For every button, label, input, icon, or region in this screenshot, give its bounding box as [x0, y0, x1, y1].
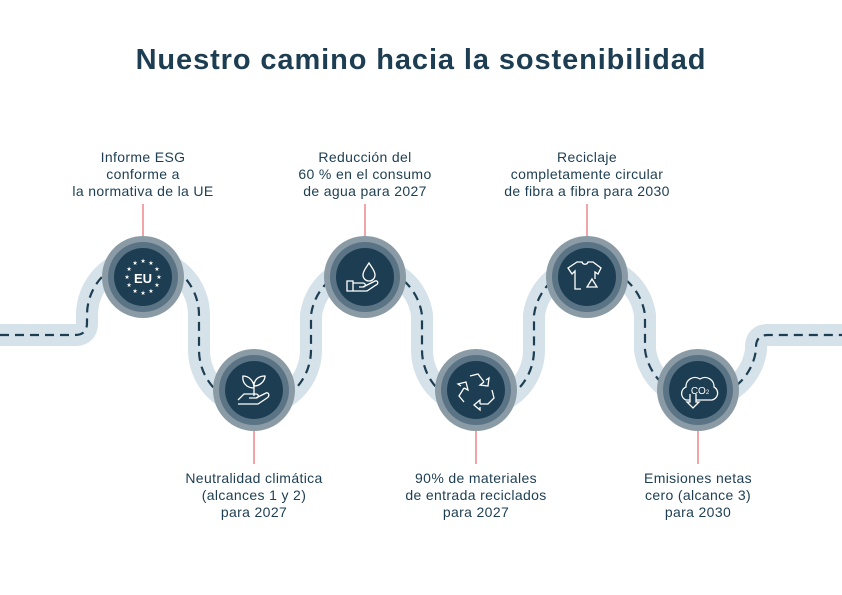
milestone: EU: ★: [124, 274, 130, 281]
milestone: EU: ★: [126, 282, 132, 289]
label 4: [185, 470, 323, 520]
label 5: 90% de materiales: [415, 470, 537, 486]
connector lines: [143, 204, 698, 464]
milestone: EU: ★: [156, 274, 162, 281]
milestone: EU: ★: [154, 266, 160, 273]
milestone: recycle: [435, 349, 517, 431]
milestone: EU: ★: [148, 260, 154, 267]
label 2: [298, 149, 432, 199]
label 5: de entrada reciclados: [405, 487, 547, 503]
milestone: CO2: CO2: [691, 386, 710, 397]
label 5: [405, 470, 547, 520]
label 2: 60 % en el consumo: [298, 166, 432, 182]
label 3: Reciclaje: [557, 149, 617, 165]
label 4: Neutralidad climática: [185, 470, 323, 486]
label 2: de agua para 2027: [303, 183, 427, 199]
label 6: Emisiones netas: [644, 470, 752, 486]
label 3: [504, 149, 670, 199]
milestone: EU: ★: [126, 266, 132, 273]
milestone: EU: [102, 236, 184, 318]
label 4: para 2027: [221, 504, 287, 520]
label 1: Informe ESG: [101, 149, 185, 165]
label 1: conforme a: [106, 166, 180, 182]
label 1: [72, 149, 214, 199]
label 6: [644, 470, 752, 520]
milestone: EU: ★: [154, 282, 160, 289]
milestone: t-shirt: [546, 236, 628, 318]
milestone: EU: ★: [140, 290, 146, 297]
milestone: EU: ★: [132, 260, 138, 267]
label 2: Reducción del: [318, 149, 412, 165]
road: [0, 259, 842, 406]
label 6: cero (alcance 3): [645, 487, 751, 503]
label 4: (alcances 1 y 2): [202, 487, 306, 503]
milestone: EU: EU: [134, 271, 152, 286]
label 3: completamente circular: [511, 166, 663, 182]
milestone: water: [324, 236, 406, 318]
label 1: la normativa de la UE: [72, 183, 214, 199]
label 6: para 2030: [665, 504, 731, 520]
milestone: CO2: [657, 349, 739, 431]
milestone: plant: [213, 349, 295, 431]
label 3: de fibra a fibra para 2030: [504, 183, 670, 199]
title: Nuestro camino hacia la sostenibilidad: [136, 44, 706, 76]
milestone: EU: ★: [132, 288, 138, 295]
milestone: EU: ★: [140, 258, 146, 265]
milestone: EU: ★: [148, 288, 154, 295]
label 5: para 2027: [443, 504, 509, 520]
